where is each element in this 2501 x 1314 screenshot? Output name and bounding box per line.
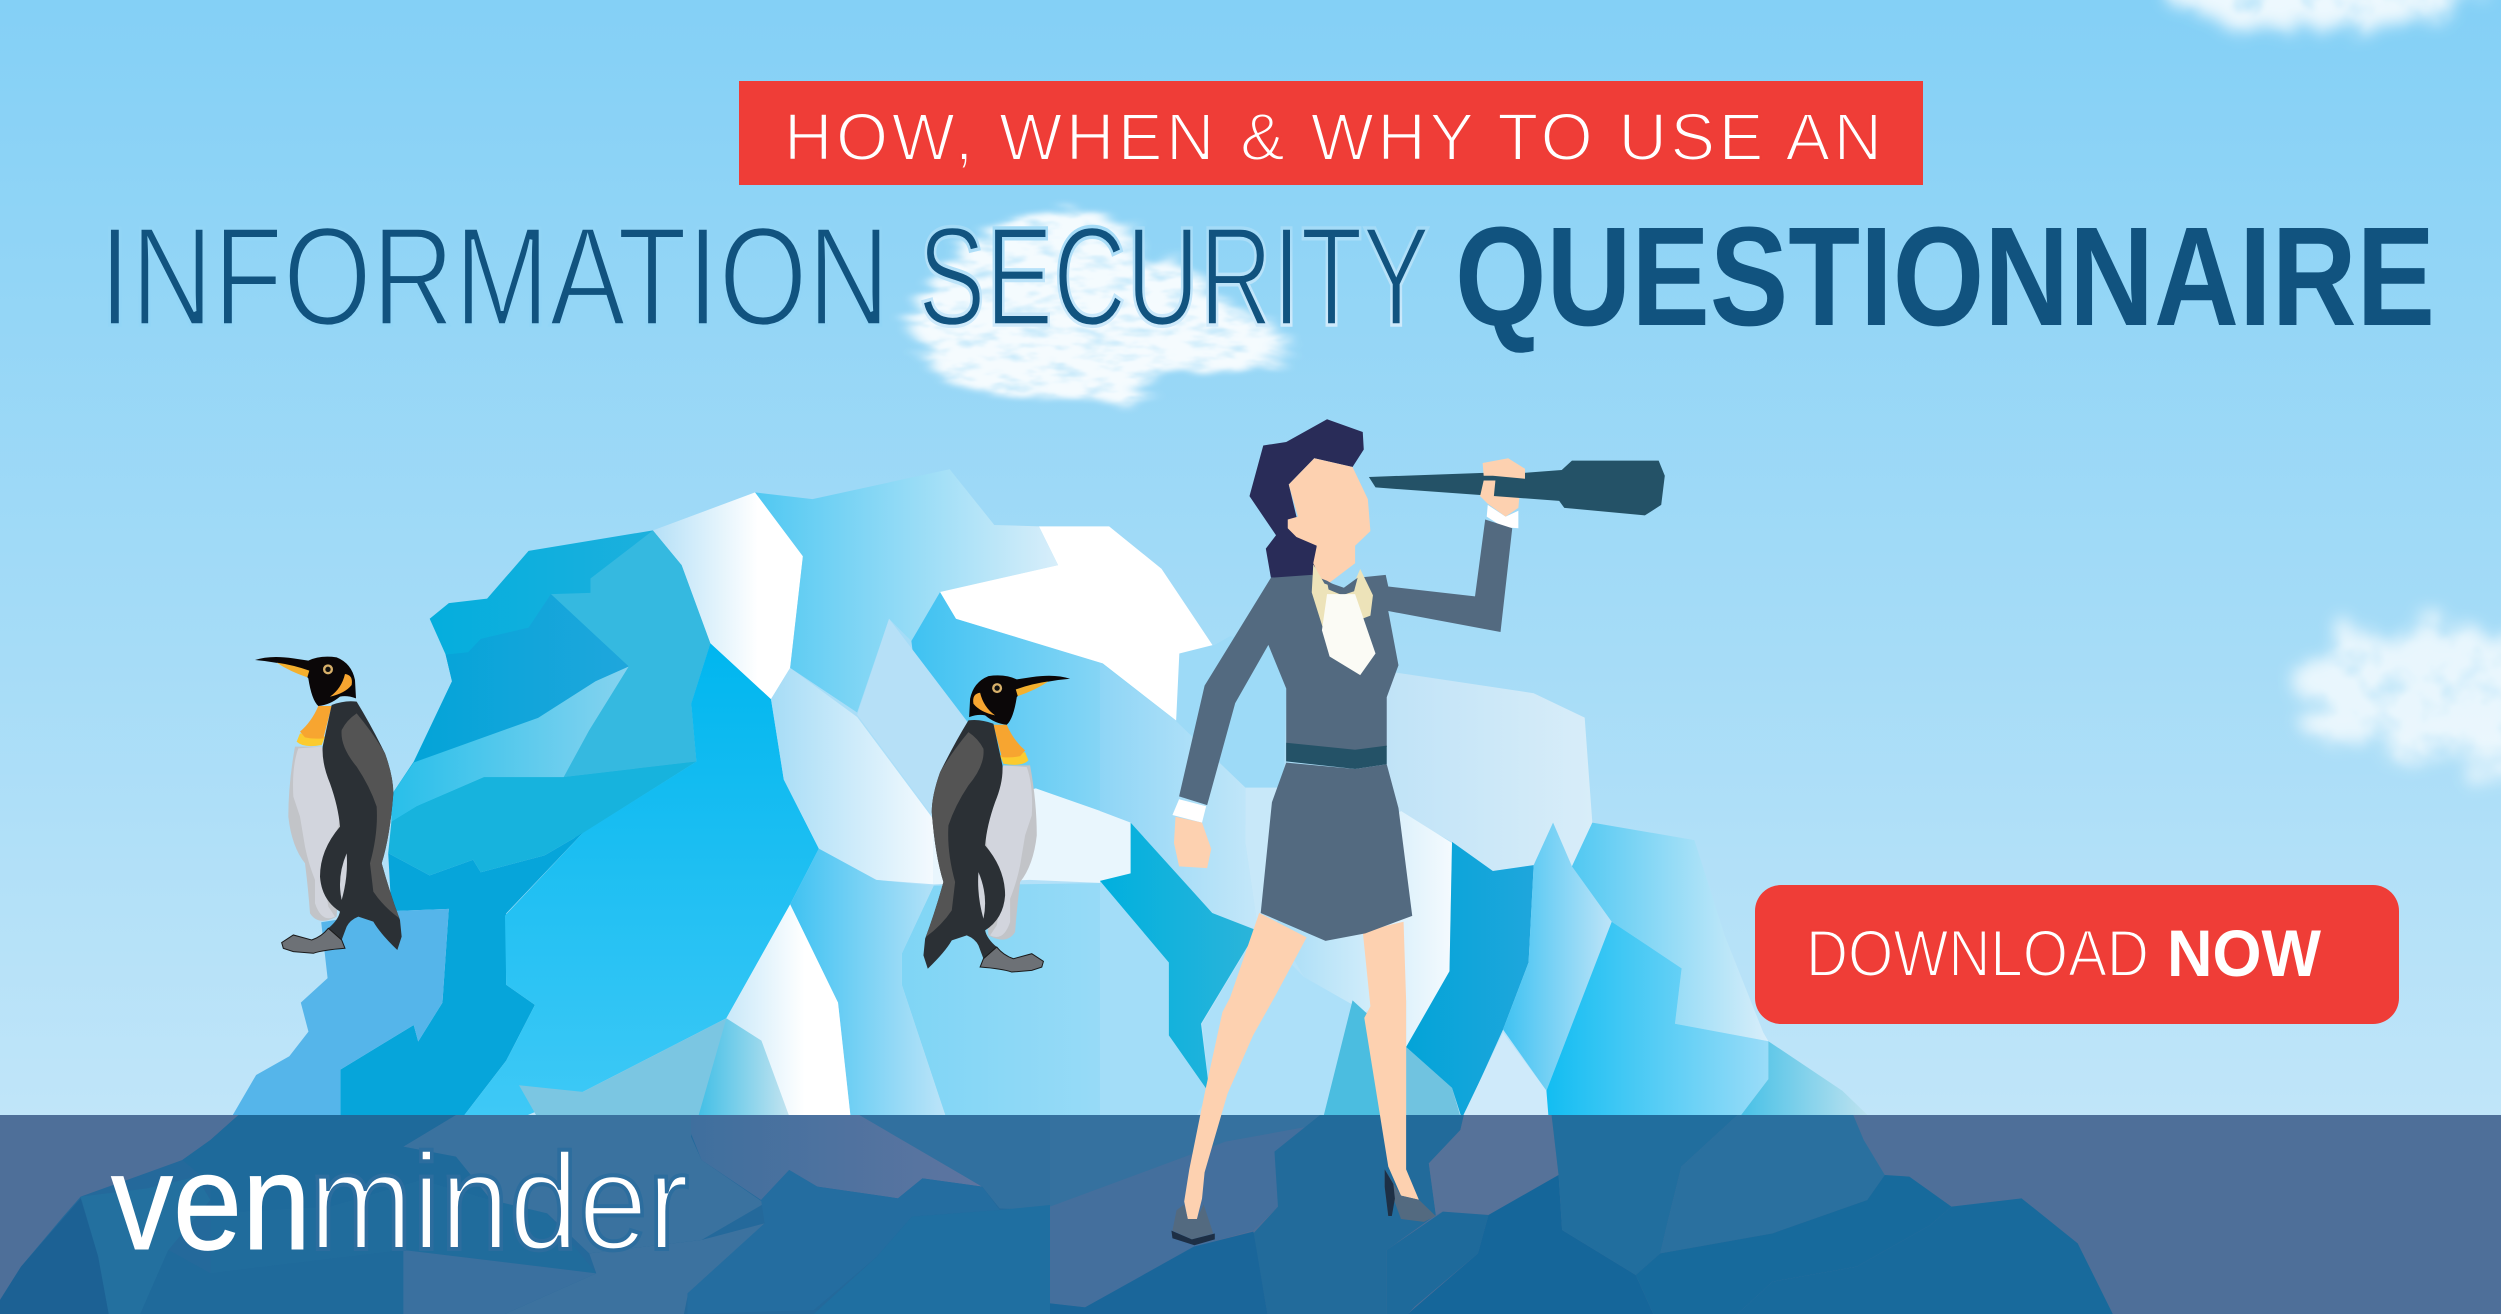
- button text: DOWNLOAD: [1806, 916, 2149, 990]
- button text: NOW: [2167, 916, 2322, 990]
- logo: venminder: [111, 1126, 689, 1279]
- submerged iceberg: left: [0, 1115, 1100, 1314]
- cloud: top right: [2165, 0, 2501, 38]
- banner text: HOW, WHEN & WHY TO USE AN: [784, 100, 1882, 175]
- submerged iceberg: right: [1050, 1115, 2113, 1314]
- woman with telescope: [1171, 419, 1665, 1245]
- download button: [1755, 885, 2399, 1024]
- logo light part: minder: [309, 1126, 689, 1279]
- cloud: centre: [910, 208, 1283, 408]
- iceberg white slab: [940, 526, 1213, 721]
- iceberg right facets: [1100, 636, 1876, 1123]
- iceberg left and centre facets: [231, 469, 1253, 1119]
- main title: [99, 197, 2435, 355]
- title light word one: INFORMATION: [99, 197, 890, 355]
- logo: venminder: ven: [111, 1126, 311, 1279]
- title banner: [739, 81, 1923, 185]
- bottom band: [0, 1115, 2501, 1314]
- iceberg: [231, 469, 1876, 1123]
- title light word two: SECURITY: [918, 197, 1430, 355]
- penguin: right: [923, 675, 1070, 972]
- cloud: right: [2300, 622, 2501, 775]
- penguin: left: [255, 657, 402, 953]
